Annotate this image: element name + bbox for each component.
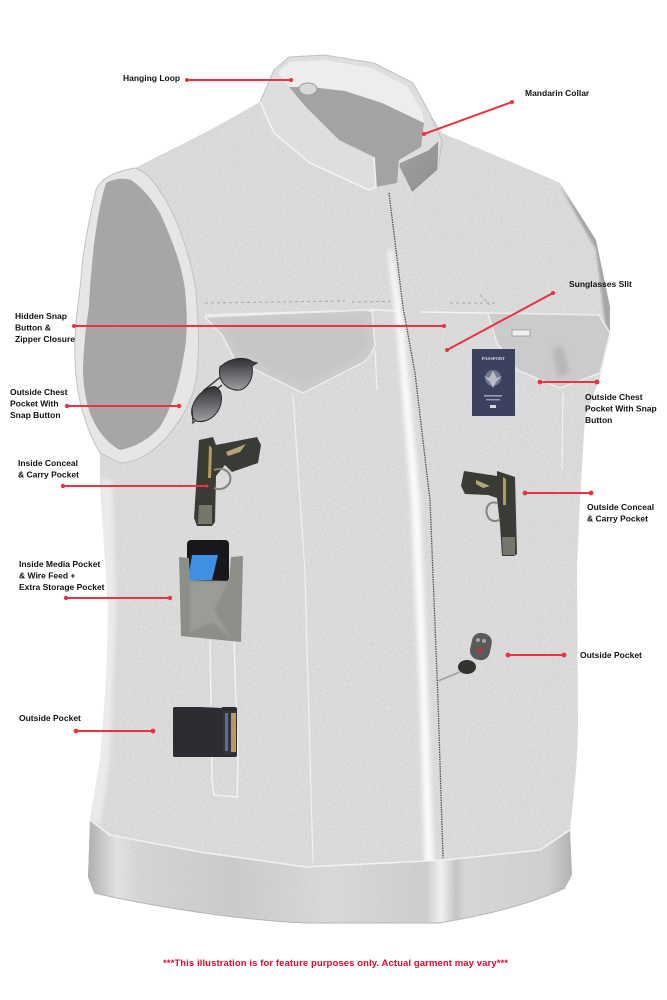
- collar inside highlight: [278, 60, 424, 123]
- zipper: [389, 193, 443, 858]
- label: hidden snap button and zipper closure: Hidden Snap: [15, 311, 67, 321]
- fabric shading and texture: [91, 104, 610, 866]
- label: inside conceal and carry pocket: Inside Conceal: [18, 458, 78, 468]
- left flap inner shade: [225, 318, 368, 384]
- hem top edge: [90, 820, 570, 867]
- callout line: hidden snap button: [72, 324, 446, 328]
- label: mandarin collar: Mandarin Collar: [525, 88, 590, 98]
- pistol: inside conceal pocket: [194, 437, 261, 526]
- vest body: [75, 55, 610, 923]
- vest seams: [293, 350, 563, 863]
- disclaimer: ***This illustration is for feature purposes only. Actual garment may vary***: [163, 958, 508, 969]
- hem band: [88, 820, 572, 923]
- collar outer wall: [260, 55, 442, 193]
- label: outside chest pocket right: Button: [585, 415, 612, 425]
- placket highlight: [388, 250, 434, 918]
- sunglasses slit: [512, 330, 530, 336]
- label: outside conceal and carry pocket: & Carry Pocket: [587, 514, 648, 524]
- callout line: outside pocket right: [506, 653, 566, 657]
- passport: [472, 349, 515, 416]
- callout line: outside chest pocket right: [538, 380, 599, 384]
- callout line: mandarin collar: [422, 100, 514, 136]
- yoke seam stitching: [205, 295, 495, 305]
- hanging loop tab: [299, 83, 317, 95]
- label: inside media pocket: Inside Media Pocket: [19, 559, 100, 569]
- pistol: outside conceal pocket: [461, 471, 517, 556]
- car key and fob: [438, 631, 493, 681]
- label: inside conceal and carry pocket: & Carry Pocket: [18, 470, 79, 480]
- left chest pocket flap: [205, 310, 375, 393]
- hem band texture: [107, 837, 542, 922]
- label: outside chest pocket right: Outside Chest: [585, 392, 643, 402]
- yoke seam highlight: [205, 310, 600, 315]
- hem bottom edge: [94, 888, 565, 923]
- callout line: sunglasses slit: [445, 291, 555, 352]
- right chest pocket flap: [488, 313, 610, 388]
- label: outside chest pocket left: Outside Chest: [10, 387, 68, 397]
- label: outside conceal and carry pocket: Outside Conceal: [587, 502, 654, 512]
- media pocket with phone: [179, 540, 243, 642]
- label: outside pocket right: Outside Pocket: [580, 650, 642, 660]
- callout line: inside media pocket: [64, 596, 172, 600]
- vest illustration: [60, 40, 630, 940]
- label: hidden snap button and zipper closure: Button &: [15, 322, 51, 332]
- callout line: outside pocket left: [74, 729, 155, 733]
- collar mesh texture: [290, 87, 424, 186]
- label: inside media pocket: Extra Storage Pocket: [19, 582, 105, 592]
- label: outside pocket left: Outside Pocket: [19, 713, 81, 723]
- armhole mesh texture: [83, 178, 186, 450]
- label: outside chest pocket left: Snap Button: [10, 410, 61, 420]
- callout line: inside conceal pocket: [61, 484, 208, 488]
- armhole mesh lining: [83, 179, 187, 450]
- label: hidden snap button and zipper closure: Zipper Closure: [15, 334, 75, 344]
- label: outside chest pocket right: Pocket With Snap: [585, 404, 657, 414]
- wallet: [173, 704, 237, 757]
- right collar lapel: [399, 140, 439, 193]
- label: outside chest pocket left: Pocket With: [10, 398, 59, 408]
- passport: PASSPORT: [482, 356, 505, 361]
- label: inside media pocket: & Wire Feed +: [19, 570, 75, 580]
- callout line: outside conceal pocket: [523, 491, 593, 495]
- sunglasses: [192, 358, 257, 423]
- callout line: outside chest pocket left: [65, 404, 181, 408]
- right flap fold: [552, 345, 570, 378]
- collar mesh lining: [289, 87, 424, 187]
- collar band stitch line: [260, 102, 376, 190]
- lower left pocket seam: [210, 640, 238, 797]
- label: hanging loop: Hanging Loop: [123, 73, 180, 83]
- label: sunglasses slit: Sunglasses Slit: [569, 279, 632, 289]
- armhole binding: [75, 168, 199, 463]
- callout line: hanging loop: [185, 78, 293, 82]
